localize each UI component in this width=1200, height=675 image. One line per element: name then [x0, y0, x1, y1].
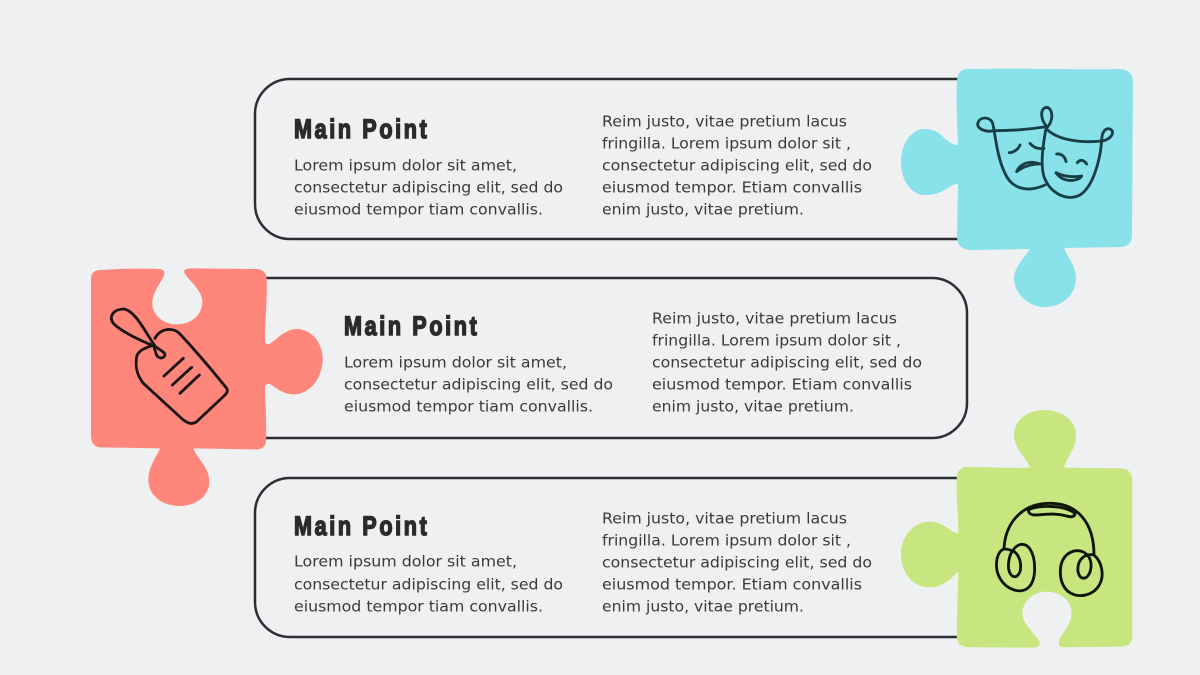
left text block top: Lorem ipsum dolor sit amet, — [294, 156, 517, 174]
puzzle piece green — [901, 410, 1132, 648]
right text block middle: enim justo, vitae pretium. — [652, 398, 854, 416]
right text block top: consectetur adipiscing elit, sed do — [602, 156, 872, 174]
left text block middle: consectetur adipiscing elit, sed do — [344, 376, 613, 394]
right text block bottom: eiusmod tempor. Etiam convallis — [602, 576, 862, 594]
heading middle: Main Point — [344, 312, 477, 342]
left text block bottom: Lorem ipsum dolor sit amet, — [294, 552, 517, 570]
right text block bottom — [602, 510, 872, 616]
right text block middle: Reim justo, vitae pretium lacus — [652, 310, 897, 328]
left text block middle: eiusmod tempor tiam convallis. — [344, 398, 593, 416]
right text block bottom: fringilla. Lorem ipsum dolor sit , — [602, 532, 851, 550]
left text block bottom: eiusmod tempor tiam convallis. — [294, 598, 543, 616]
icon: price tag — [111, 309, 227, 423]
right text block top: enim justo, vitae pretium. — [602, 200, 804, 218]
puzzle piece blue — [901, 69, 1133, 307]
right text block middle: consectetur adipiscing elit, sed do — [652, 354, 922, 372]
left text block middle — [344, 354, 613, 416]
left text block middle: Lorem ipsum dolor sit amet, — [344, 354, 567, 372]
heading bottom: Main Point — [294, 512, 427, 542]
left text block bottom — [294, 552, 563, 616]
panel: top row — [255, 69, 1133, 307]
right text block bottom: Reim justo, vitae pretium lacus — [602, 510, 847, 528]
right text block top — [602, 112, 872, 218]
left text block top: consectetur adipiscing elit, sed do — [294, 178, 563, 196]
right text block middle — [652, 310, 922, 416]
right text block top: Reim justo, vitae pretium lacus — [602, 112, 847, 130]
right text block bottom: consectetur adipiscing elit, sed do — [602, 554, 872, 572]
left text block top: eiusmod tempor tiam convallis. — [294, 200, 543, 218]
left text block top — [294, 156, 563, 218]
outlined box bottom — [255, 478, 965, 637]
right text block top: fringilla. Lorem ipsum dolor sit , — [602, 134, 851, 152]
right text block bottom: enim justo, vitae pretium. — [602, 598, 804, 616]
right text block middle: eiusmod tempor. Etiam convallis — [652, 376, 912, 394]
panel: bottom row — [255, 410, 1132, 648]
right text block top: eiusmod tempor. Etiam convallis — [602, 178, 862, 196]
puzzle piece red — [91, 268, 323, 506]
outlined box middle — [260, 278, 967, 438]
heading top: Main Point — [294, 115, 427, 145]
icon: headphones — [997, 503, 1102, 596]
icon: theatre masks — [978, 107, 1113, 197]
left text block bottom: consectetur adipiscing elit, sed do — [294, 576, 563, 594]
right text block middle: fringilla. Lorem ipsum dolor sit , — [652, 332, 901, 350]
outlined box top — [255, 79, 965, 239]
panel: middle row — [91, 268, 967, 506]
